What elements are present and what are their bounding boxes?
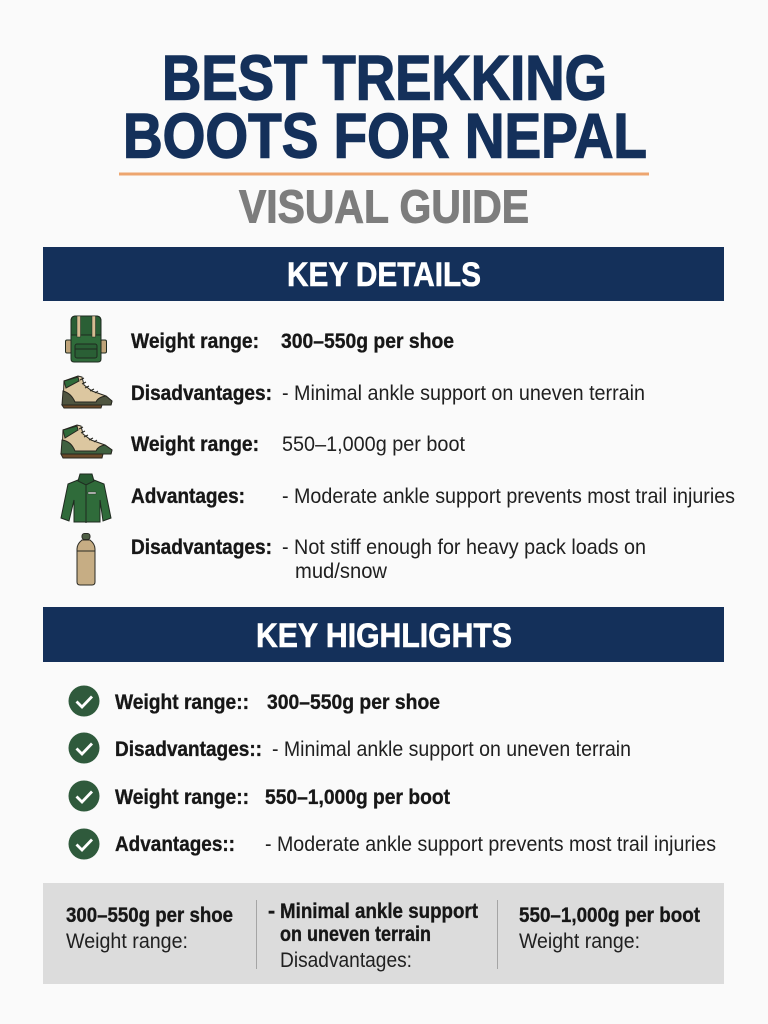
heading: key details xyxy=(43,247,724,301)
highlight: weight range boot: 550–1,000g per boot xyxy=(265,785,450,809)
highlight: weight range shoe xyxy=(68,686,440,716)
title underline xyxy=(119,172,649,176)
highlight: weight range shoe: Weight range:: xyxy=(115,690,249,714)
row: disadvantages stiffness xyxy=(131,535,646,583)
row: disadvantages ankle: Disadvantages: xyxy=(131,381,272,405)
summary: boot weight: 550–1,000g per boot xyxy=(519,903,700,927)
summary: disadvantage: on uneven terrain xyxy=(280,922,431,946)
row: weight range shoe: Weight range: xyxy=(131,329,259,353)
row: disadvantages ankle: - Minimal ankle support on uneven terrain xyxy=(282,381,645,405)
heading: key details: KEY DETAILS xyxy=(287,256,481,294)
title: BEST TREKKING xyxy=(162,44,607,114)
highlight: weight range boot: Weight range:: xyxy=(115,785,249,809)
summary: shoe weight xyxy=(66,903,233,953)
panel: key highlights xyxy=(43,607,724,860)
icon: backpack xyxy=(66,316,106,362)
icon: water bottle xyxy=(77,534,95,585)
title xyxy=(123,44,647,172)
heading: key highlights: KEY HIGHLIGHTS xyxy=(256,617,512,655)
row: disadvantages stiffness: mud/snow xyxy=(295,559,387,583)
highlight: weight range shoe: 300–550g per shoe xyxy=(267,690,440,714)
summary: disadvantage: - xyxy=(268,899,275,923)
panel: key details xyxy=(43,247,735,585)
summary: disadvantage: Disadvantages: xyxy=(280,948,412,972)
summary: boot weight xyxy=(519,903,700,953)
title: BOOTS FOR NEPAL xyxy=(123,102,647,172)
summary: boot weight: Weight range: xyxy=(519,929,640,953)
icon: hiking boot xyxy=(61,425,112,458)
row: advantages: - Moderate ankle support prevents most trail injuries xyxy=(282,484,735,508)
highlight: advantages: - Moderate ankle support prevents most trail injuries xyxy=(265,832,716,856)
heading: key highlights xyxy=(43,607,724,662)
summary: shoe weight: 300–550g per shoe xyxy=(66,903,233,927)
row: weight range shoe xyxy=(131,329,454,353)
row: disadvantages ankle xyxy=(131,381,645,405)
highlight: disadvantages: - Minimal ankle support on uneven terrain xyxy=(272,737,631,761)
row: advantages: Advantages: xyxy=(131,484,245,508)
subtitle: VISUAL GUIDE xyxy=(239,180,529,232)
row: weight range boot: Weight range: xyxy=(131,432,259,456)
row: disadvantages stiffness: - Not stiff enough for heavy pack loads on xyxy=(282,535,646,559)
highlight: advantages xyxy=(68,828,716,860)
summary: disadvantage: Minimal ankle support xyxy=(280,899,478,923)
icon: jacket xyxy=(61,474,111,523)
highlight: weight range boot xyxy=(68,780,450,812)
highlight: disadvantages xyxy=(68,732,631,764)
row: disadvantages stiffness: Disadvantages: xyxy=(131,535,272,559)
row: weight range shoe: 300–550g per shoe xyxy=(281,329,454,353)
summary: disadvantage xyxy=(268,899,478,972)
summary: shoe weight: Weight range: xyxy=(66,929,188,953)
panel: summary strip xyxy=(43,883,724,984)
icon: low boot xyxy=(62,376,112,408)
row: weight range boot xyxy=(131,432,465,456)
highlight: advantages: Advantages:: xyxy=(115,832,235,856)
row: weight range boot: 550–1,000g per boot xyxy=(282,432,465,456)
highlight: disadvantages: Disadvantages:: xyxy=(115,737,262,761)
